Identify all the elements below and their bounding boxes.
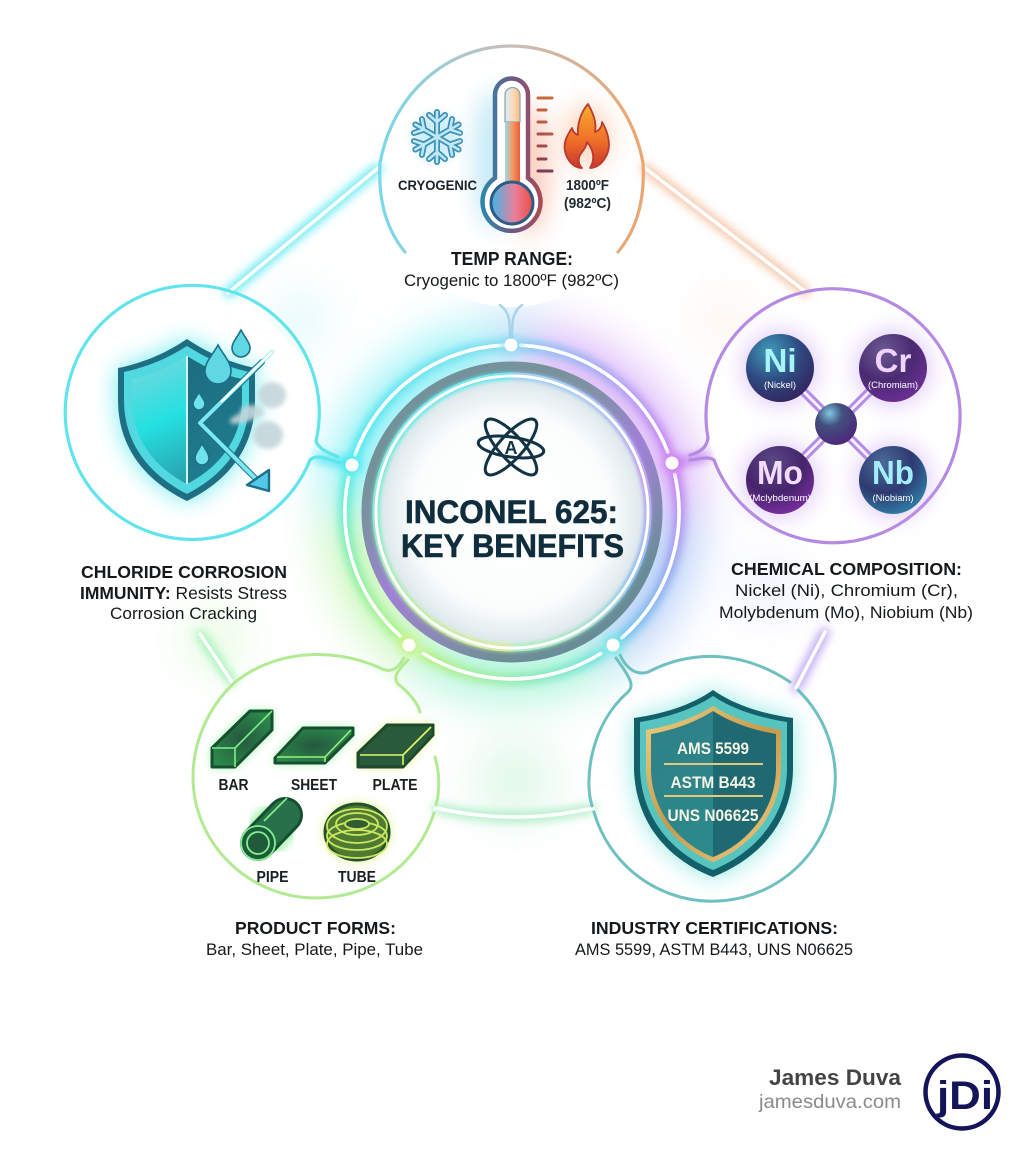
connection nodes [343, 336, 681, 654]
icon: atom: A [504, 438, 518, 458]
outer glow ring segments [345, 345, 679, 679]
icon: flame [563, 104, 611, 169]
panel: industry certifications circle outline [589, 655, 835, 901]
label: 1800F: (982ºC) [564, 196, 611, 212]
icon: snowflake [411, 112, 463, 162]
text: temp range: TEMP RANGE: [451, 249, 573, 269]
atom: nickel: (Nickel) [764, 380, 796, 391]
labels: pipe tube [256, 869, 376, 886]
labels: bar sheet plate: BAR [218, 777, 248, 794]
text: product forms [206, 918, 423, 959]
water drops [193, 330, 250, 465]
certification names: UNS N06625 [668, 806, 758, 825]
icon: atom [477, 412, 545, 482]
text: product forms: PRODUCT FORMS: [235, 918, 396, 938]
text: industry certifications: INDUSTRY CERTIFICATIONS: [591, 918, 838, 938]
footer: author name: jamesduva.com [758, 1091, 901, 1113]
icon: certification shield [634, 690, 793, 877]
title: KEY BENEFITS [401, 528, 624, 564]
icon: bar [212, 711, 272, 767]
panel: outer circle discs [64, 49, 960, 900]
icon: pipe [241, 798, 287, 860]
atom: chromium: (Chromiam) [868, 380, 918, 391]
atom: niobium: Nb [872, 454, 914, 491]
text: chemical composition: Nickel (Ni), Chromium (Cr), [735, 581, 958, 600]
text: chemical composition [719, 559, 973, 622]
icon: thermometer [474, 78, 550, 236]
panel: product forms circle outline [193, 654, 439, 898]
icon: tube coil [323, 802, 391, 862]
icon: alloy molecule [744, 332, 929, 516]
text: chemical composition: CHEMICAL COMPOSITION: [731, 559, 962, 579]
connector lines between circles [200, 168, 825, 817]
footer: author name [758, 1065, 902, 1113]
text: chloride corrosion: CHLORIDE CORROSION [81, 562, 287, 582]
atom: nickel: Ni [764, 342, 796, 379]
inner bright ring [376, 376, 648, 648]
molecule bonds [800, 388, 873, 458]
text: temp range: Cryogenic to 1800ºF (982ºC) [404, 271, 619, 290]
panel: chemical composition circle outline [690, 289, 960, 543]
atom: nickel [746, 334, 814, 402]
certification names [668, 739, 758, 825]
certification names: AMS 5599 [677, 739, 749, 758]
label: cryogenic: CRYOGENIC [398, 178, 477, 193]
label: 1800F: 1800ºF [566, 178, 609, 194]
text: chloride corrosion [80, 562, 287, 623]
atom: molybdenum: (Mclybdenum) [749, 493, 811, 504]
footer: author name: James Duva [769, 1065, 902, 1090]
labels: pipe tube: TUBE [338, 869, 376, 886]
labels: bar sheet plate: SHEET [291, 777, 337, 794]
deflection arrow [200, 352, 272, 481]
certification names: ASTM B443 [670, 773, 756, 792]
text: industry certifications: AMS 5599, ASTM B443, UNS N06625 [575, 941, 853, 959]
text: chloride corrosion: Corrosion Cracking [110, 604, 257, 623]
text: chemical composition: Molybdenum (Mo), Niobium (Nb) [719, 603, 973, 622]
atom: molybdenum: Mo [757, 454, 803, 491]
panel: central hub [345, 345, 679, 679]
core disc [372, 372, 652, 652]
labels: bar sheet plate: PLATE [372, 777, 418, 794]
atom: niobium [859, 446, 927, 514]
text: product forms: Bar, Sheet, Plate, Pipe, Tube [206, 940, 423, 959]
label: 1800F [564, 178, 611, 212]
panel: chloride corrosion circle outline [65, 285, 340, 539]
text: temp range [404, 249, 619, 290]
title [401, 494, 624, 564]
smoke [228, 382, 286, 449]
text: chloride corrosion: IMMUNITY: Resists Stress [80, 583, 287, 603]
text: industry certifications [575, 918, 853, 959]
atom: chromium [859, 334, 927, 402]
atom: niobium: (Niobiam) [872, 493, 914, 504]
labels: bar sheet plate [218, 777, 418, 794]
dark ring [367, 367, 657, 657]
atom: chromium: Cr [875, 342, 911, 379]
atom: molybdenum [746, 446, 814, 514]
icon: sheet [275, 728, 353, 763]
labels: pipe tube: PIPE [256, 869, 288, 886]
icon: corrosion shield [118, 330, 286, 501]
title: INCONEL 625: [405, 494, 618, 530]
footer: JDi logo: jDi [936, 1074, 993, 1118]
thermometer scale ticks [538, 98, 552, 171]
icon: plate [358, 725, 433, 767]
footer: JDi logo [926, 1056, 998, 1128]
panel: temp range circle outline [380, 46, 643, 252]
